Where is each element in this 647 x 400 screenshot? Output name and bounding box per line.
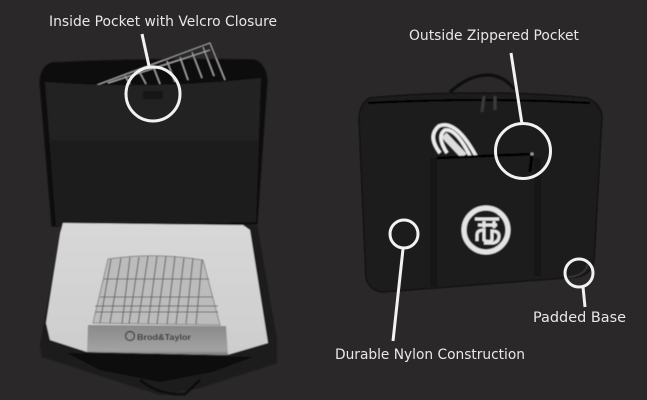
callout: padded base (565, 259, 593, 307)
bag interior front (67, 353, 253, 382)
oven front plate with brand (87, 325, 228, 355)
zipper pull (530, 154, 532, 172)
open bag with oven (40, 43, 277, 395)
logo (464, 208, 508, 252)
zipper pulls (482, 96, 495, 112)
oven body (46, 223, 268, 355)
oven rack (95, 256, 218, 324)
closed bag (359, 75, 602, 292)
top zip seam (368, 100, 590, 103)
front handle (140, 380, 200, 394)
callout: inside pocket (126, 34, 180, 121)
power cord in pocket (433, 125, 476, 156)
top handle (450, 75, 514, 92)
oven window (93, 256, 220, 325)
velcro tab (143, 91, 163, 99)
bag base (40, 225, 277, 395)
outer pocket zipper (437, 154, 532, 158)
padded base seam (568, 263, 588, 277)
callout: outside pocket (496, 53, 550, 178)
brand name: Brod&Taylor (137, 333, 191, 342)
label: padded base: Padded Base (533, 310, 626, 326)
callout: nylon (390, 220, 418, 341)
inside pocket panel (45, 78, 261, 226)
label: outside pocket: Outside Zippered Pocket (409, 28, 579, 44)
wire rack in lid (97, 43, 225, 85)
brand logo (126, 332, 134, 340)
vertical straps (430, 158, 541, 286)
bag lid (40, 59, 267, 226)
label: inside pocket: Inside Pocket with Velcro Closure (49, 14, 277, 30)
bag body (359, 93, 602, 292)
label: durable nylon: Durable Nylon Construction (335, 347, 525, 363)
